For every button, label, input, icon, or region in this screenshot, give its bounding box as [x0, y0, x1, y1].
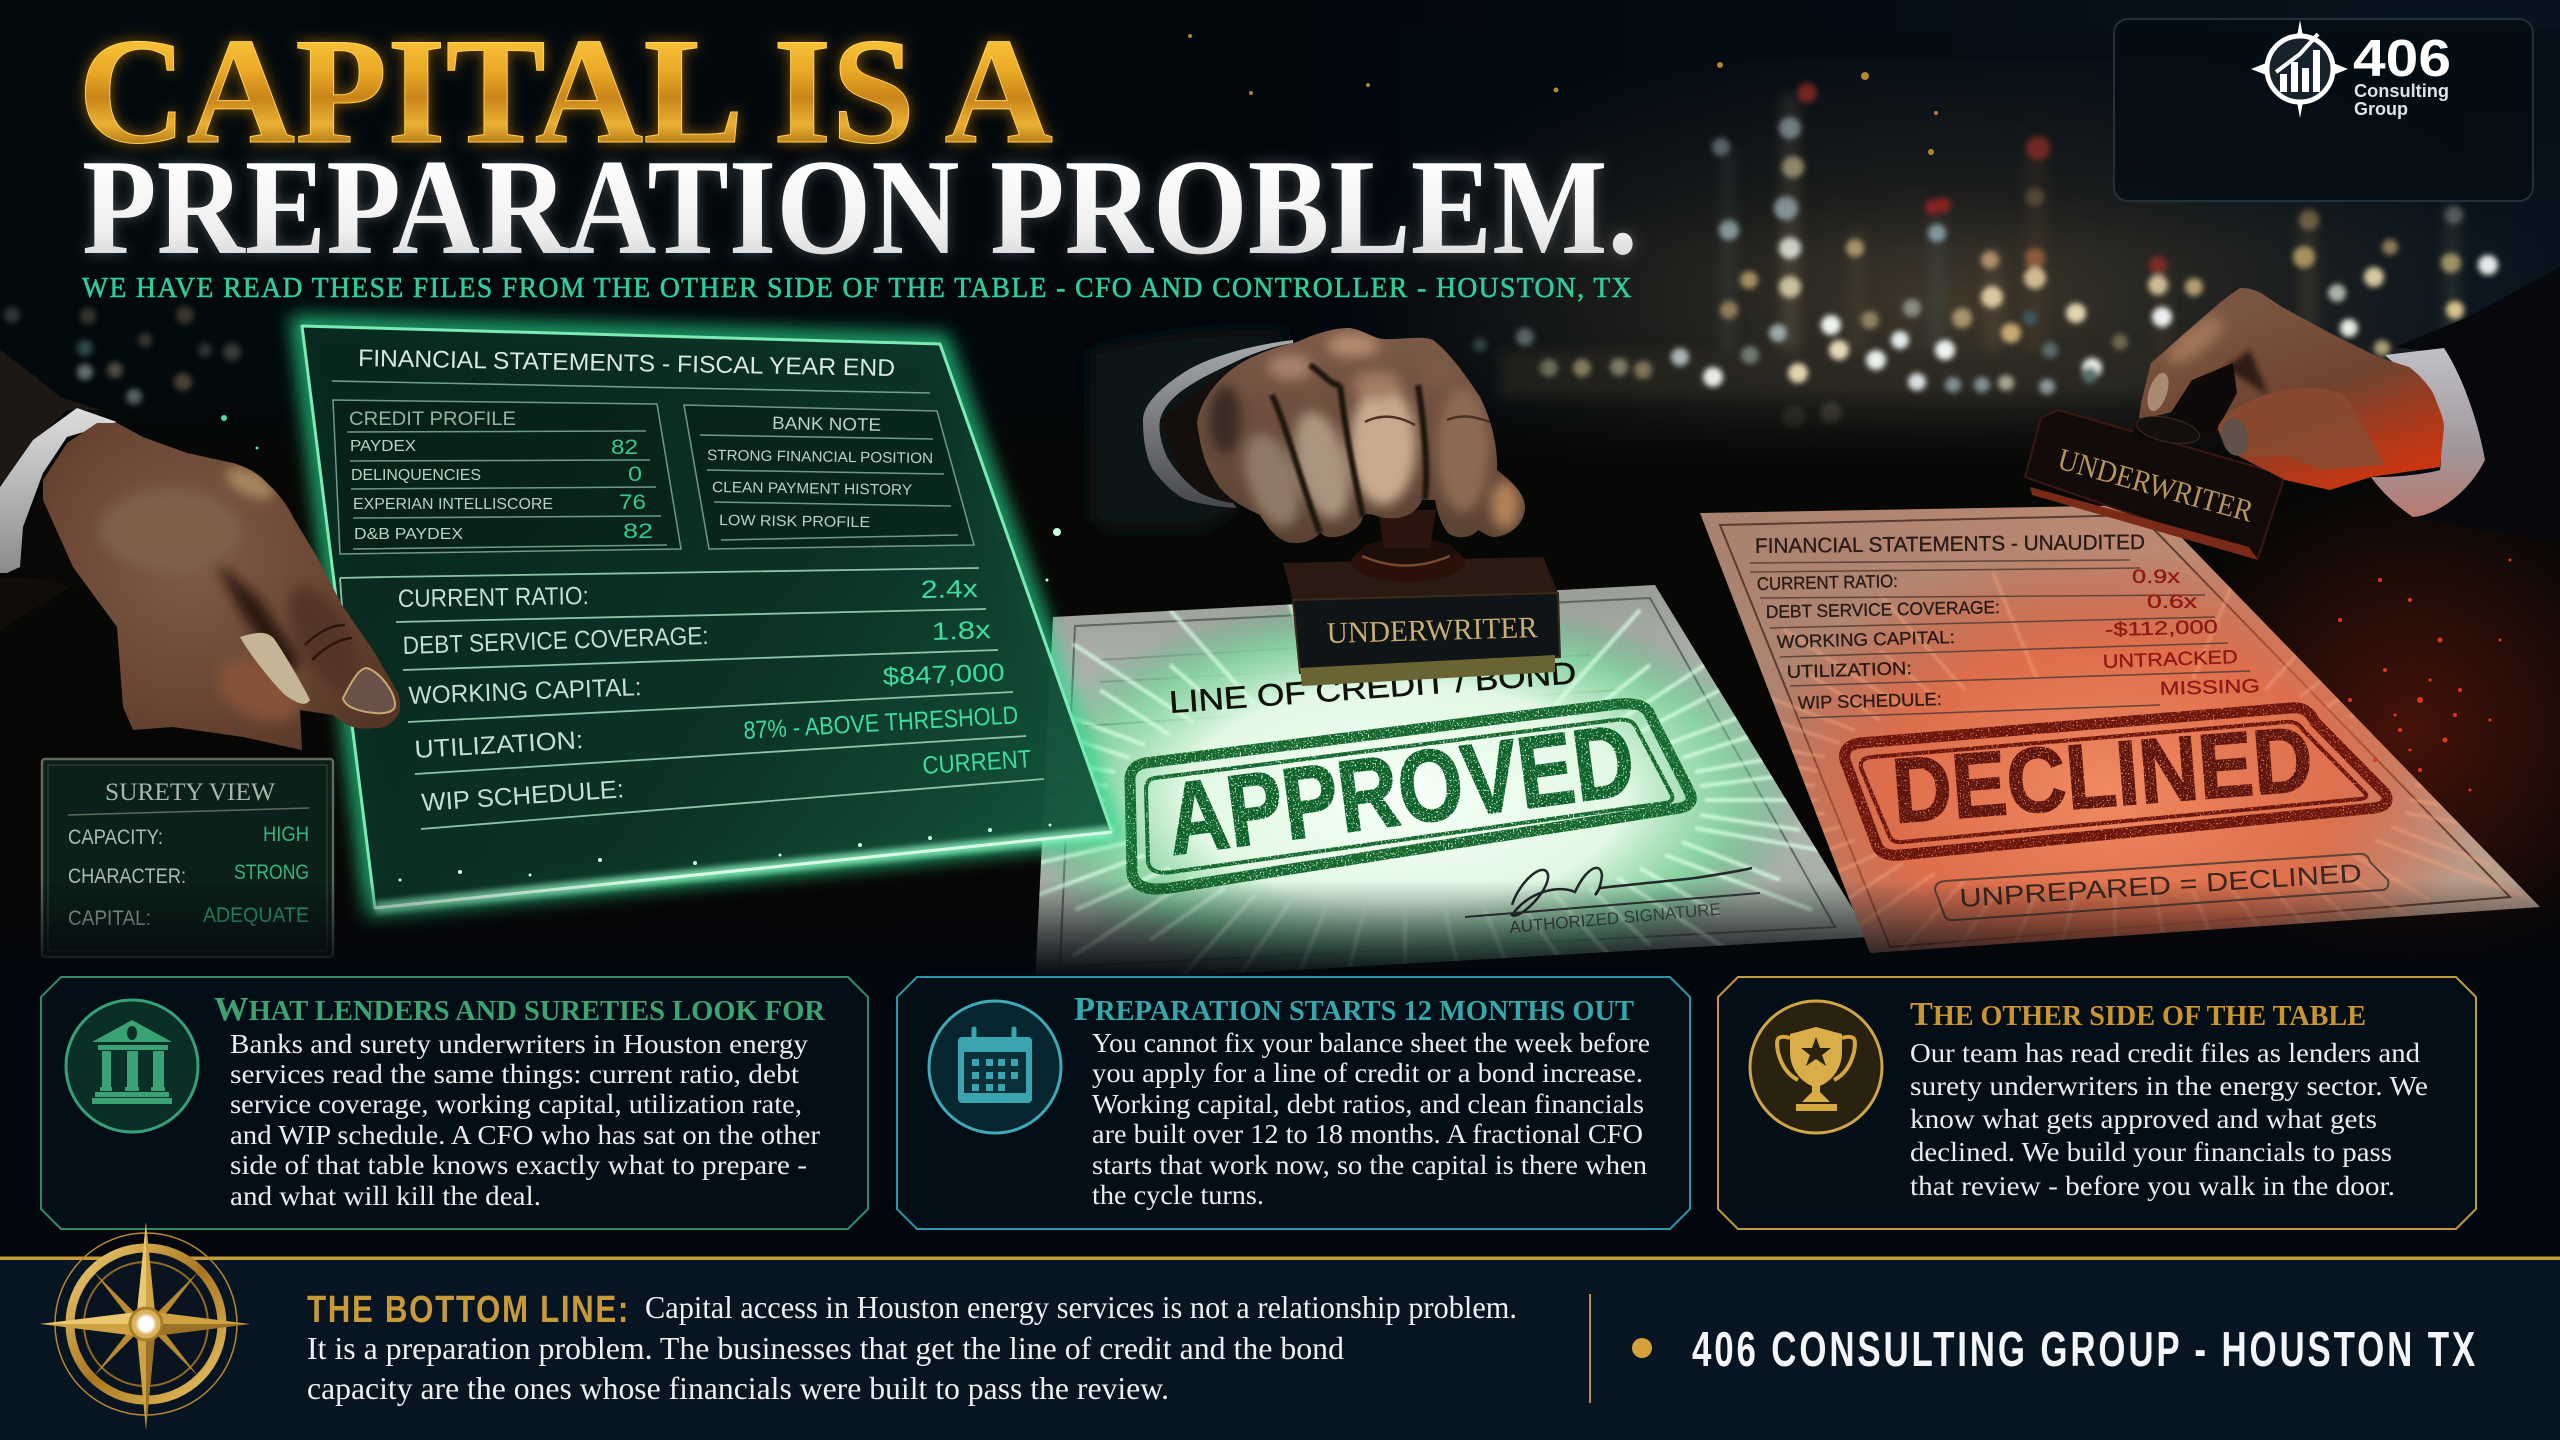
table: key ratios: 1.8x — [931, 616, 992, 646]
table: credit profile: 82 — [623, 520, 653, 543]
surety rows: CAPACITY: — [68, 826, 163, 849]
panel: footer band — [0, 1222, 2560, 1440]
card body: Our team has read credit files as lenders and — [1910, 1038, 2421, 1068]
table: bank note: LOW RISK PROFILE — [719, 512, 870, 531]
declined statement rows: FINANCIAL STATEMENTS - UNAUDITED — [1755, 531, 2145, 558]
card body: declined. We build your financials to pass — [1910, 1137, 2392, 1167]
background: lower fade — [0, 880, 2560, 980]
icon: gold compass — [40, 1222, 250, 1430]
card heading: THE OTHER SIDE OF THE TABLE — [1910, 996, 2366, 1033]
logo wordmark: Group — [2354, 99, 2408, 119]
card body — [1092, 1028, 1650, 1210]
card body: You cannot fix your balance sheet the week before — [1092, 1028, 1650, 1058]
table: key ratios: 2.4x — [921, 575, 979, 604]
bottom line text: capacity are the ones whose financials were built to pass the review. — [307, 1370, 1169, 1406]
declined statement rows: CURRENT RATIO: — [1757, 571, 1898, 594]
table: key ratios: 87% - ABOVE THRESHOLD — [743, 701, 1019, 745]
declined statement rows: UTILIZATION: — [1786, 658, 1912, 682]
stamp: center underwriter — [1283, 510, 1560, 686]
document: declined financial statements — [1700, 506, 2540, 953]
bottom line text — [307, 1289, 1517, 1406]
table: key ratios — [340, 568, 1044, 829]
table: key ratios: DEBT SERVICE COVERAGE: — [402, 622, 709, 660]
card body: are built over 12 to 18 months. A fractional CFO — [1092, 1119, 1643, 1149]
icon: trophy — [1750, 1001, 1882, 1133]
surety rows: HIGH — [263, 823, 309, 846]
bottom line text: Capital access in Houston energy services is not a relationship problem. — [645, 1289, 1517, 1325]
table: credit profile: 0 — [628, 463, 642, 486]
panel: surety view — [42, 759, 333, 957]
card body: surety underwriters in the energy sector. We — [1910, 1071, 2428, 1101]
table: key ratios: WORKING CAPITAL: — [408, 673, 642, 710]
declined statement rows: 0.9x — [2132, 567, 2181, 588]
declined statement rows — [1750, 531, 2260, 718]
declined statement rows: -$112,000 — [2105, 617, 2218, 641]
logo wordmark — [2353, 30, 2451, 119]
icon: gold dot — [1632, 1338, 1652, 1358]
table: credit profile: 82 — [611, 436, 638, 459]
surety rows — [68, 823, 309, 930]
card body: services read the same things: current ratio, debt — [230, 1059, 800, 1089]
logo wordmark: Consulting — [2354, 81, 2449, 101]
declined statement rows: WORKING CAPITAL: — [1777, 627, 1955, 652]
declined statement rows: 0.6x — [2147, 592, 2198, 613]
table: key ratios: CURRENT RATIO: — [398, 582, 589, 613]
background: ember glow — [2100, 450, 2560, 980]
label: line of credit: LINE OF CREDIT / BOND — [1168, 655, 1577, 720]
stamp: approved: APPROVED — [1160, 702, 1641, 877]
table: bank note: CLEAN PAYMENT HISTORY — [712, 479, 912, 499]
declined statement rows: WIP SCHEDULE: — [1798, 689, 1942, 713]
table: key ratios: $847,000 — [882, 659, 1005, 691]
panel sparkles — [221, 415, 1061, 882]
declined glow — [1770, 562, 2522, 951]
table: credit profile: EXPERIAN INTELLISCORE — [353, 496, 553, 513]
card heading: WHAT LENDERS AND SURETIES LOOK FOR — [214, 991, 826, 1028]
panel: glowing financial statements — [221, 326, 1112, 908]
table: key ratios: WIP SCHEDULE: — [421, 775, 625, 817]
table: credit profile — [333, 400, 681, 554]
document: approved line of credit — [1036, 585, 1864, 976]
approved glow — [1039, 604, 1819, 970]
table: bank note: STRONG FINANCIAL POSITION — [707, 447, 933, 467]
surety rows: ADEQUATE — [203, 904, 309, 927]
declined statement rows: MISSING — [2160, 676, 2260, 700]
card body: starts that work now, so the capital is there when — [1092, 1150, 1648, 1180]
table: credit profile: CREDIT PROFILE — [349, 409, 516, 430]
title line: preparation problem: PREPARATION PROBLEM. — [82, 131, 1638, 283]
stamp: declined: DECLINED — [1889, 708, 2316, 843]
card body — [1910, 1038, 2428, 1201]
icon: calendar — [929, 1001, 1061, 1133]
hand: center — [1090, 328, 1525, 543]
card body: Banks and surety underwriters in Houston energy — [230, 1029, 809, 1059]
logo card — [2114, 19, 2533, 201]
table: credit profile: DELINQUENCIES — [351, 467, 481, 484]
background: dark table surface — [0, 385, 2560, 985]
card body: that review - before you walk in the door. — [1910, 1171, 2395, 1201]
title line: capital is a: CAPITAL IS A — [78, 7, 1053, 175]
bottom line text: It is a preparation problem. The businesses that get the line of credit and the bond — [307, 1330, 1344, 1366]
stamp: right underwriter — [2025, 410, 2285, 560]
card body: you apply for a line of credit or a bond increase. — [1092, 1058, 1643, 1088]
hand: left pointing — [0, 350, 400, 750]
card body: service coverage, working capital, utilization rate, — [230, 1089, 802, 1119]
panel: the other side of the table — [1718, 977, 2476, 1229]
surety rows: CHARACTER: — [68, 865, 186, 888]
card body: and WIP schedule. A CFO who has sat on the other — [230, 1120, 820, 1150]
icon: bank — [66, 1000, 198, 1132]
surety heading: SURETY VIEW — [105, 779, 275, 806]
stamp label: UNDERWRITER — [1326, 611, 1538, 650]
table: credit profile: PAYDEX — [350, 438, 416, 455]
signature — [1465, 868, 1760, 937]
callout: unprepared equals declined — [1935, 854, 2388, 920]
callout: unprepared equals declined: UNPREPARED = DECLINED — [1958, 858, 2363, 913]
signature: AUTHORIZED SIGNATURE — [1509, 900, 1722, 937]
table: bank note — [684, 405, 974, 549]
declined statement rows: DEBT SERVICE COVERAGE: — [1766, 597, 2000, 622]
stamp label: UNDERWRITER — [2054, 441, 2257, 529]
title — [78, 7, 1638, 283]
declined statement rows: UNTRACKED — [2102, 647, 2238, 673]
hand: right — [2130, 267, 2560, 543]
bottom line text: THE BOTTOM LINE: — [307, 1289, 630, 1331]
card body — [230, 1029, 820, 1211]
card body: side of that table knows exactly what to prepare - — [230, 1150, 807, 1180]
embers — [2338, 558, 2512, 792]
card heading: PREPARATION STARTS 12 MONTHS OUT — [1074, 991, 1634, 1028]
surety rows: STRONG — [234, 861, 309, 884]
card body: and what will kill the deal. — [230, 1181, 541, 1211]
icon: compass logo — [2251, 20, 2348, 118]
subtitle: WE HAVE READ THESE FILES FROM THE OTHER SIDE OF THE TABLE - CFO AND CONTROLLER - HOUSTON, TX — [82, 272, 1633, 304]
table: key ratios: UTILIZATION: — [414, 726, 584, 764]
logo wordmark: 406 — [2353, 30, 2451, 88]
panel heading: FINANCIAL STATEMENTS - FISCAL YEAR END — [358, 345, 895, 382]
panel: preparation starts 12 months out — [897, 977, 1690, 1229]
background: card zone — [0, 978, 2560, 1260]
panel: what lenders and sureties look for — [41, 977, 868, 1229]
table: key ratios: CURRENT — [922, 745, 1032, 780]
card body: the cycle turns. — [1092, 1180, 1264, 1210]
background: refinery skyline bokeh — [4, 30, 2560, 460]
table: bank note: BANK NOTE — [772, 413, 881, 435]
table: credit profile: D&B PAYDEX — [354, 526, 463, 543]
card body: know what gets approved and what gets — [1910, 1104, 2377, 1134]
surety rows: CAPITAL: — [68, 907, 151, 930]
table: credit profile: 76 — [619, 491, 646, 514]
card body: Working capital, debt ratios, and clean financials — [1092, 1089, 1644, 1119]
